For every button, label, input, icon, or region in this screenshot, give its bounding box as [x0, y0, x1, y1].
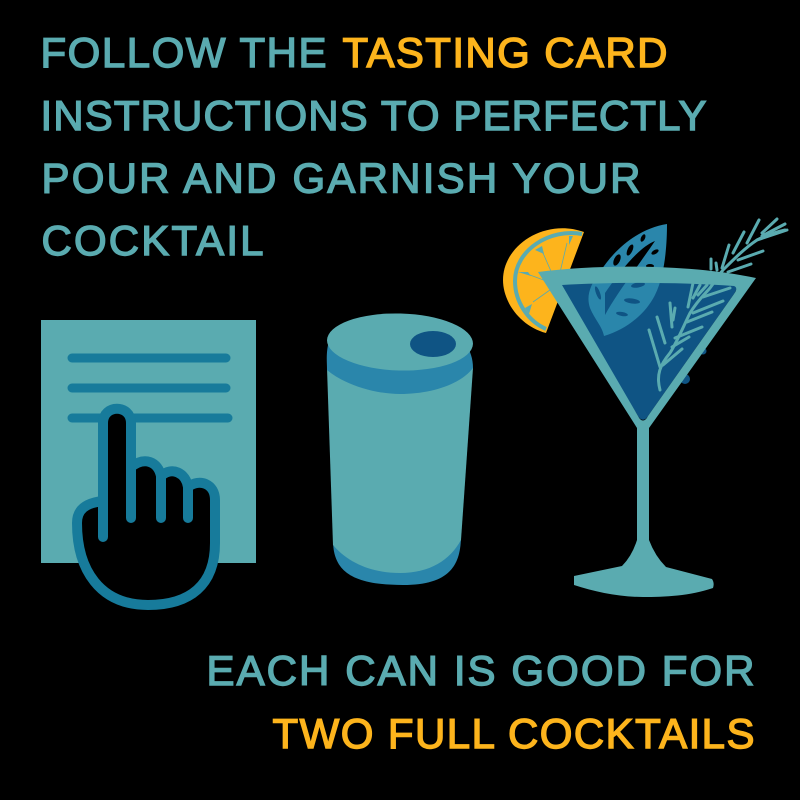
card [41, 320, 256, 563]
stem and foot [574, 426, 714, 597]
heading: follow the tasting card instructions: FOLLOW THE [40, 29, 326, 76]
icon: cocktail with garnish [503, 219, 787, 597]
heading: follow the tasting card instructions: TASTING CARD [342, 29, 668, 76]
icon: tasting card with pointing hand [41, 320, 256, 605]
pointing hand [77, 409, 215, 605]
can body [327, 368, 473, 573]
can neck band [327, 345, 473, 394]
can base shadow [333, 535, 461, 585]
glass bowl and rim [538, 267, 756, 428]
liquid [556, 280, 737, 420]
orange slice [503, 228, 584, 333]
can opening [410, 331, 456, 357]
icon: can [326, 312, 474, 585]
rosemary sprig [649, 219, 787, 390]
leaf [588, 224, 667, 336]
caption: each can is good for two full cocktails [206, 647, 754, 757]
card text lines [72, 358, 228, 418]
caption: each can is good for two full cocktails: TWO FULL COCKTAILS [272, 710, 754, 757]
heading: follow the tasting card instructions: INSTRUCTIONS TO PERFECTLY [40, 92, 706, 139]
heading: follow the tasting card instructions: COCKTAIL [42, 217, 264, 264]
can lid [326, 312, 474, 372]
bubbles [680, 374, 690, 384]
heading: follow the tasting card instructions [40, 29, 706, 264]
caption: each can is good for two full cocktails: EACH CAN IS GOOD FOR [206, 647, 754, 694]
heading: follow the tasting card instructions: POUR AND GARNISH YOUR [42, 154, 640, 202]
